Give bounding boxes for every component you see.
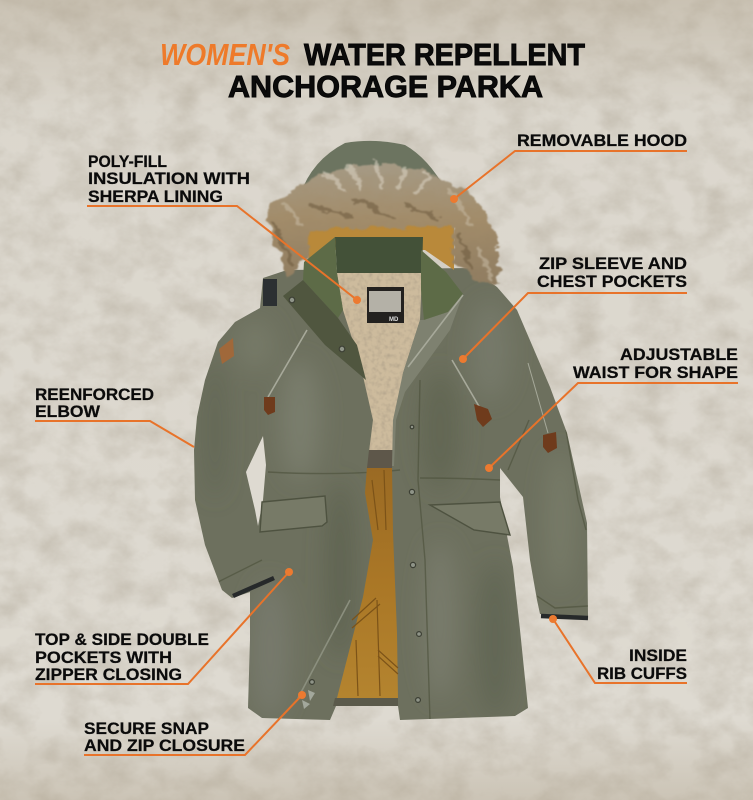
callout: adjustable waist: WAIST FOR SHAPE — [573, 363, 738, 382]
fur trim — [266, 160, 499, 284]
parka body and sleeves — [194, 268, 588, 720]
quilting seams — [352, 470, 398, 696]
callout: double pockets: POCKETS WITH — [35, 648, 172, 667]
arm gap left — [246, 436, 266, 526]
callout: cuffs: RIB CUFFS — [597, 664, 687, 683]
hood quilted interior — [303, 222, 454, 270]
zipper slider at hem — [302, 690, 315, 709]
snaps — [289, 297, 421, 702]
callout: snap closure: AND ZIP CLOSURE — [84, 736, 245, 755]
left collar flap — [303, 237, 343, 318]
callout: insulation: POLY-FILL — [88, 152, 167, 171]
callout: pockets: ZIP SLEEVE AND — [539, 254, 687, 273]
hood shell — [300, 141, 446, 240]
callout: pockets: CHEST POCKETS — [537, 272, 687, 291]
title: WOMEN'S — [160, 37, 290, 72]
callout: removable hood — [450, 131, 687, 203]
right front edge — [392, 294, 463, 466]
sherpa hem band — [367, 450, 393, 468]
fabric shading — [251, 315, 567, 707]
callout: double pockets — [35, 568, 293, 684]
callout: elbow: REENFORCED — [35, 385, 154, 404]
callout: cuffs — [549, 615, 687, 683]
callout: elbow: ELBOW — [35, 402, 101, 421]
parka illustration — [180, 141, 600, 730]
callout: cuffs: INSIDE — [629, 646, 687, 665]
callout: pockets — [459, 254, 687, 363]
pocket flaps — [260, 496, 510, 535]
callout: insulation — [87, 152, 361, 304]
quilted lining — [337, 466, 398, 698]
callout: adjustable waist: ADJUSTABLE — [620, 345, 738, 364]
callout: insulation: INSULATION WITH — [88, 169, 250, 188]
right collar flap — [421, 250, 463, 320]
callout: snap closure — [84, 691, 306, 755]
collar back — [335, 237, 423, 273]
title: ANCHORAGE PARKA — [228, 69, 543, 104]
sleeve and waist creases — [210, 380, 588, 720]
velcro tab — [263, 279, 277, 306]
callout: removable hood: REMOVABLE HOOD — [517, 131, 687, 150]
callout: snap closure: SECURE SNAP — [84, 719, 209, 738]
callout: adjustable waist — [485, 345, 738, 472]
callout: elbow — [35, 385, 194, 447]
callout: double pockets: ZIPPER CLOSING — [35, 665, 182, 684]
left storm placket — [283, 280, 366, 380]
callout: insulation: SHERPA LINING — [88, 187, 223, 206]
zipper pullers — [264, 397, 557, 453]
title: WATER REPELLENT — [304, 37, 585, 72]
sherpa lining — [337, 273, 422, 452]
size tag: MD — [389, 317, 399, 323]
chest and front zippers — [268, 295, 548, 698]
lining hem — [333, 698, 398, 706]
cuffs — [233, 578, 588, 618]
size tag — [367, 287, 404, 323]
shoulder patch — [219, 338, 234, 364]
callout: double pockets: TOP & SIDE DOUBLE — [35, 630, 209, 649]
title — [160, 37, 585, 104]
